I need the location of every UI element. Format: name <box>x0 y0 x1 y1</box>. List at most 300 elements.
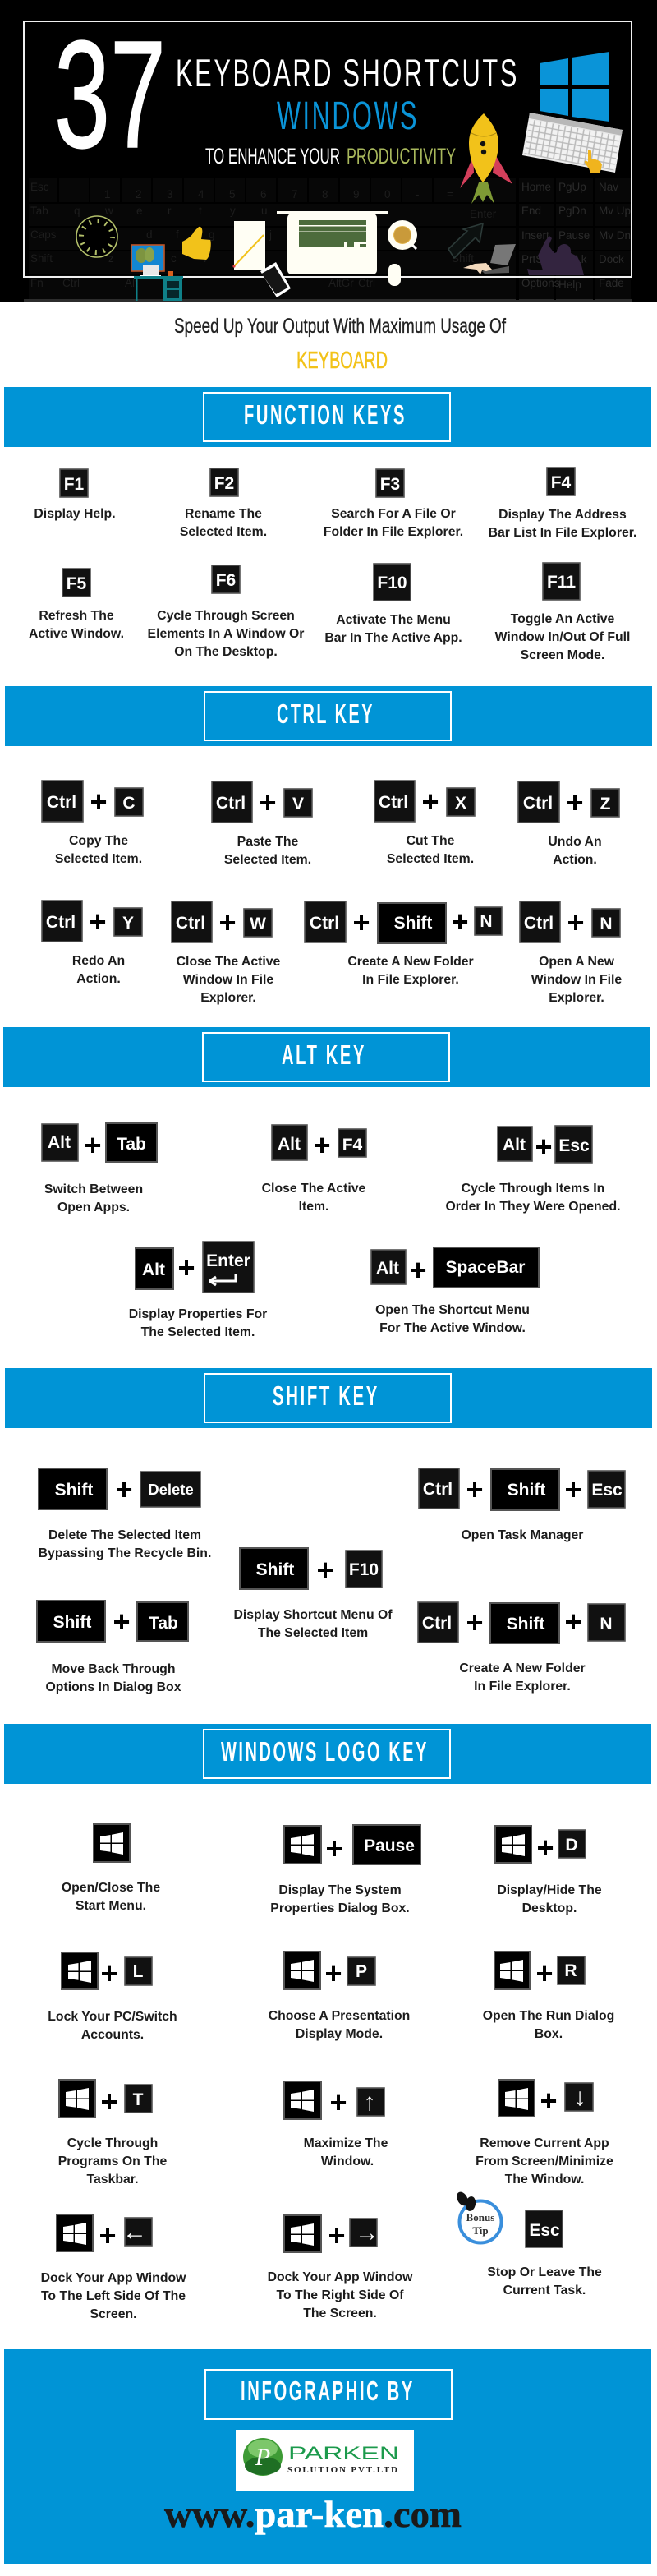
shortcut: F6: Cycle Through Screen <box>157 609 295 623</box>
bonus tip: esc <box>454 2190 602 2297</box>
faded keyboard background: Ctrl <box>62 277 80 289</box>
faded keyboard background: q <box>74 205 80 217</box>
shortcut: shift+delete: + <box>115 1472 133 1506</box>
faded keyboard background: u <box>261 205 268 217</box>
faded keyboard background: 6 <box>260 188 267 200</box>
shortcut: alt+spacebar: SpaceBar <box>446 1258 525 1277</box>
shortcut: win+r: + <box>535 1956 554 1990</box>
shortcut: alt+spacebar: Alt <box>376 1259 399 1278</box>
heading: function keys <box>4 387 651 447</box>
shortcut: win+l: L <box>133 1962 144 1981</box>
shortcut: win+t: Taskbar. <box>87 2173 138 2187</box>
faded keyboard background: PgUp <box>558 181 586 193</box>
shortcut: ctrl+shift+n: In File Explorer. <box>362 973 459 987</box>
shortcut: win+right: The Screen. <box>303 2306 377 2320</box>
shortcut: win+pause: Display The System <box>278 1883 402 1897</box>
shortcut: ctrl+shift+n: In File Explorer. <box>474 1680 571 1694</box>
shortcut: F2 <box>180 468 267 539</box>
shortcut: win+down: The Window. <box>505 2173 584 2187</box>
shortcut: win+left: + <box>99 2219 117 2252</box>
shortcut: F10: F10 <box>377 574 407 592</box>
shortcut: alt+esc: + <box>535 1130 553 1164</box>
shortcut: ctrl+v: Ctrl <box>216 794 246 813</box>
faded keyboard background: Fn <box>30 277 44 289</box>
shortcut: F6 <box>148 565 304 659</box>
shortcut: F2: F2 <box>214 474 234 493</box>
shortcut: alt+f4: + <box>313 1128 331 1162</box>
shortcut: ctrl+v: Paste The <box>237 835 299 849</box>
heading: shift key <box>5 1368 652 1428</box>
tagline: TO ENHANCE YOUR <box>205 144 340 168</box>
shortcut: alt+esc: Esc <box>558 1136 590 1155</box>
shortcut: win+t: + <box>100 2085 118 2118</box>
faded keyboard background: Ctrl <box>358 277 375 289</box>
shortcut: ctrl+y: Y <box>122 914 134 933</box>
faded keyboard background: 8 <box>322 188 328 200</box>
shortcut: alt+enter: + <box>177 1251 195 1284</box>
faded keyboard background: r <box>168 205 172 217</box>
bonus tip: esc: Current Task. <box>503 2283 586 2297</box>
shortcut: ctrl+shift+n: Shift <box>394 914 432 933</box>
faded keyboard background: ScrLk <box>558 253 587 265</box>
bonus tip: esc: Stop Or Leave The <box>487 2265 602 2279</box>
shortcut: win+right: + <box>328 2219 346 2252</box>
shortcut: win+l <box>48 1952 177 2042</box>
shortcut: ctrl+z: Z <box>600 795 611 813</box>
shortcut: alt+spacebar: Open The Shortcut Menu <box>375 1303 530 1317</box>
shortcut: ctrl+shift+n: + <box>564 1605 582 1638</box>
faded keyboard background: c <box>171 252 177 265</box>
shortcut: win+d <box>495 1826 602 1915</box>
shortcut: win+t <box>58 2080 167 2187</box>
shortcut: ctrl+x: Cut The <box>407 834 455 848</box>
shortcut: win+d: Display/Hide The <box>497 1883 602 1897</box>
icon: thumbs up <box>182 227 211 260</box>
icon: mouse <box>388 264 401 286</box>
shortcut: ctrl+shift+esc: Open Task Manager <box>462 1528 583 1542</box>
shortcut: ctrl+x: X <box>455 794 466 813</box>
shortcut: ctrl+n: N <box>600 915 613 933</box>
faded keyboard background: Alt <box>125 277 138 289</box>
shortcut: alt+esc <box>445 1126 621 1214</box>
shortcut: win+left: ← <box>122 2219 147 2246</box>
shortcut: ctrl+shift+esc: Ctrl <box>423 1480 453 1499</box>
shortcut: ctrl+v <box>212 781 312 867</box>
shortcut: F10: Activate The Menu <box>336 613 451 627</box>
shortcut: ctrl+c: Selected Item. <box>55 852 142 866</box>
shortcut: alt+tab <box>42 1123 157 1214</box>
shortcut: win+p <box>269 1952 410 2041</box>
faded keyboard background: Mv Dn <box>599 229 631 242</box>
white frame <box>24 21 632 277</box>
icon: outlined arrow <box>448 223 483 258</box>
shortcut: ctrl+shift+n: + <box>352 906 370 939</box>
shortcut: alt+enter: The Selected Item. <box>141 1325 255 1339</box>
shortcut: shift+tab <box>37 1601 188 1694</box>
faded keyboard background: 5 <box>229 188 236 200</box>
big number 37: 37 <box>54 10 166 180</box>
shortcut: ctrl+shift+n <box>305 901 502 987</box>
shortcut: shift+f10: Display Shortcut Menu Of <box>233 1608 393 1622</box>
shortcut: ctrl+w <box>172 901 281 1005</box>
faded keyboard background: End <box>521 205 541 217</box>
shortcut: ctrl+c: Ctrl <box>47 793 76 812</box>
shortcut: shift+tab: Tab <box>149 1614 178 1633</box>
shortcut: win+left: Dock Your App Window <box>41 2271 186 2285</box>
shortcut: alt+f4: F4 <box>342 1136 363 1154</box>
faded keyboard background: w <box>104 205 113 217</box>
website url: www.par-ken.com <box>164 2493 462 2535</box>
faded keyboard background: AltGr <box>328 277 354 289</box>
shortcut: alt+enter: Alt <box>142 1260 165 1279</box>
faded keyboard background: Options <box>521 277 560 289</box>
shortcut: win+right <box>268 2215 413 2320</box>
shortcut: shift+tab: + <box>113 1605 131 1638</box>
shortcut: alt+tab: Switch Between <box>44 1182 143 1196</box>
shortcut: F10: Bar In The Active App. <box>324 631 462 645</box>
faded keyboard background: = <box>447 188 453 200</box>
panel: shift key <box>5 1368 652 1694</box>
shortcut: alt+tab: Open Apps. <box>57 1200 130 1214</box>
shortcut: win+up: ↑ <box>363 2089 376 2116</box>
shortcut: win+l: + <box>100 1956 118 1990</box>
shortcut: win+left <box>41 2214 186 2321</box>
shortcut: shift+tab: Shift <box>53 1613 91 1632</box>
shortcut: F1: Display Help. <box>34 507 116 521</box>
shortcut: win+p: Display Mode. <box>296 2027 383 2041</box>
tagline: PRODUCTIVITY <box>347 144 456 168</box>
shortcut: ctrl+x: Selected Item. <box>387 852 474 866</box>
shortcut: win+t: Cycle Through <box>67 2136 158 2150</box>
shortcut: F3 <box>324 469 463 539</box>
shortcut: ctrl+w: Close The Active <box>177 955 281 969</box>
logo: parken solution: SOLUTION PVT.LTD <box>287 2465 397 2475</box>
faded keyboard background: Enter <box>470 208 497 220</box>
shortcut: ctrl+w: Ctrl <box>176 914 205 933</box>
faded keyboard background: 2 <box>136 188 142 200</box>
faded keyboard background: g <box>209 228 215 241</box>
shortcut: F6: Elements In A Window Or <box>148 627 304 641</box>
faded keyboard background: d <box>146 228 153 241</box>
shortcut: win+up: Window. <box>321 2154 374 2168</box>
panel: ctrl key <box>5 686 652 1005</box>
faded keyboard background: Tab <box>30 205 48 217</box>
shortcut: shift+tab: Move Back Through <box>52 1662 175 1676</box>
shortcut: win+r: Open The Run Dialog <box>483 2009 614 2023</box>
shortcut: win+t: T <box>133 2090 144 2109</box>
shortcut: win+d: Desktop. <box>522 1901 577 1915</box>
shortcut: shift+delete <box>39 1468 211 1560</box>
faded keyboard background: Mv Up <box>599 205 631 217</box>
shortcut: alt+f4: Item. <box>299 1200 328 1214</box>
panel: function keys <box>4 387 651 662</box>
faded keyboard background: 1 <box>104 188 111 200</box>
shortcut: ctrl+v: Selected Item. <box>224 853 311 867</box>
shortcut: win+d: + <box>536 1831 554 1864</box>
shortcut: F2: Selected Item. <box>180 525 267 539</box>
shortcut: win+up: + <box>329 2085 347 2119</box>
shortcut: win+l: Lock Your PC/Switch <box>48 2010 177 2024</box>
shortcut: ctrl+n: Explorer. <box>549 991 604 1005</box>
shortcut: ctrl+shift+n: Create A New Folder <box>347 955 474 969</box>
shortcut: alt+esc: Cycle Through Items In <box>462 1182 604 1196</box>
shortcut: ctrl+c: Copy The <box>69 834 128 848</box>
faded keyboard background: 4 <box>198 188 204 200</box>
shortcut: ctrl+w: W <box>250 915 266 933</box>
shortcut: ctrl+z: Undo An <box>548 835 602 849</box>
heading: windows logo key: WINDOWS LOGO KEY <box>221 1737 429 1767</box>
shortcut: ctrl+y <box>42 901 142 986</box>
shortcut: ctrl+shift+n: Ctrl <box>422 1614 452 1633</box>
shortcut: win+p: P <box>356 1962 367 1981</box>
shortcut: shift+f10: + <box>316 1553 334 1587</box>
shortcut: ctrl+z <box>518 781 619 867</box>
faded keyboard background: Home <box>521 181 551 193</box>
faded keyboard background: Insert <box>521 229 549 242</box>
keyword: keyboard: KEYBOARD <box>296 348 388 374</box>
shortcut: win+r: R <box>564 1961 577 1980</box>
shortcut: ctrl+y: Ctrl <box>46 913 76 932</box>
shortcut: win+pause: + <box>325 1832 343 1865</box>
subtitle <box>174 315 506 374</box>
shortcut: alt+tab: + <box>84 1128 102 1162</box>
icon: notebook and pencil <box>232 221 265 270</box>
title: windows: WINDOWS <box>277 94 419 138</box>
shortcut: ctrl+shift+n: N <box>480 912 493 931</box>
shortcut: shift+delete: Delete The Selected Item <box>48 1528 201 1542</box>
shortcut: F11: Screen Mode. <box>521 648 604 662</box>
shortcut: ctrl+v: + <box>259 786 277 819</box>
shortcut: F11 <box>495 563 630 662</box>
bonus tip: esc: Esc <box>529 2221 560 2240</box>
shortcut: ctrl+shift+esc: + <box>466 1472 484 1506</box>
faded keyboard background: z <box>108 252 114 265</box>
icon: wall clock <box>76 216 117 257</box>
heading: shift key: SHIFT KEY <box>273 1381 379 1412</box>
shortcut: F5: Active Window. <box>29 627 124 641</box>
shortcut: win+down: Remove Current App <box>480 2136 609 2150</box>
shortcut: ctrl+c: C <box>122 794 136 813</box>
shortcut: alt+esc: Alt <box>503 1136 526 1154</box>
shortcut: F6: On The Desktop. <box>174 645 278 659</box>
faded keyboard background: t <box>199 205 202 217</box>
shortcut: win: Start Menu. <box>76 1899 146 1913</box>
faded keyboard background: Fade <box>599 277 624 289</box>
shortcut: win+t: Programs On The <box>58 2154 167 2168</box>
shortcut: win+r <box>483 1952 614 2041</box>
shortcut: F5: F5 <box>67 574 87 593</box>
shortcut: ctrl+shift+esc: Shift <box>508 1481 545 1500</box>
shortcut: win+down: ↓ <box>573 2084 586 2111</box>
faded keyboard background <box>24 178 632 302</box>
icon: person silhouette <box>527 236 584 275</box>
shortcut: ctrl+x: + <box>421 785 439 818</box>
heading: alt key <box>3 1027 650 1087</box>
shortcut: alt+spacebar: For The Active Window. <box>379 1321 526 1335</box>
panel: footer <box>4 2349 651 2564</box>
faded keyboard background: v <box>202 252 208 265</box>
heading: ctrl key <box>5 686 652 746</box>
icon: windows logo <box>540 52 609 122</box>
shortcut: win <box>62 1824 160 1913</box>
shortcut: ctrl+w: Explorer. <box>200 991 256 1005</box>
faded keyboard background: Dock <box>599 253 624 265</box>
faded keyboard background: Esc <box>30 181 49 193</box>
shortcut: alt+f4: Alt <box>278 1135 301 1154</box>
shortcut: ctrl+shift+esc: Esc <box>591 1481 623 1500</box>
shortcut: ctrl+y: Redo An <box>72 954 125 968</box>
shortcut: ctrl+shift+n <box>418 1602 625 1694</box>
shortcut: F3: Search For A File Or <box>331 507 456 521</box>
shortcut: ctrl+n: Open A New <box>539 955 615 969</box>
icon: hand on laptop <box>463 244 516 274</box>
shortcut: alt+f4 <box>262 1125 366 1214</box>
shortcut: F4: Bar List In File Explorer. <box>489 526 636 540</box>
shortcut: ctrl+w: + <box>218 906 237 939</box>
shortcut: win+l: Accounts. <box>81 2028 144 2042</box>
shortcut: ctrl+y: Action. <box>76 972 121 986</box>
shortcut: ctrl+x <box>374 781 475 866</box>
shortcut: F6: F6 <box>216 571 236 590</box>
shortcut: alt+esc: Order In They Were Opened. <box>445 1200 621 1214</box>
shortcut: F1: F1 <box>64 475 85 494</box>
shortcut: F11: F11 <box>547 573 576 592</box>
shortcut: ctrl+x: Ctrl <box>379 793 408 812</box>
shortcut: ctrl+n: + <box>567 906 585 939</box>
icon: smartphone <box>260 262 291 297</box>
icon: rocket <box>460 113 512 204</box>
faded keyboard background: - <box>416 188 419 200</box>
heading: infographic by <box>205 2370 452 2419</box>
shortcut: shift+tab: Options In Dialog Box <box>46 1680 181 1694</box>
icon: bonus tip pin badge <box>454 2190 501 2243</box>
faded keyboard background: 9 <box>353 188 360 200</box>
shortcut: ctrl+v: V <box>292 795 304 813</box>
shortcut: F5 <box>29 569 124 641</box>
shortcut: win+down: + <box>540 2084 558 2117</box>
shortcut: ctrl+c: + <box>90 785 108 818</box>
panel: windows logo key <box>4 1724 651 2321</box>
faded keyboard background: Pause <box>558 229 590 242</box>
shortcut: ctrl+shift+esc <box>419 1468 625 1542</box>
subtitle: Speed Up Your Output With Maximum Usage Of <box>174 315 506 338</box>
shortcut: shift+f10: The Selected Item <box>258 1626 368 1640</box>
logo: parken solution <box>236 2430 414 2491</box>
faded keyboard background: e <box>136 205 143 217</box>
shortcut: win: Open/Close The <box>62 1881 160 1895</box>
shortcut: win+d: D <box>565 1836 578 1855</box>
shortcut: F1 <box>34 469 116 521</box>
shortcut: ctrl+c <box>42 781 143 866</box>
shortcut: win+up <box>284 2081 388 2168</box>
icon: open laptop <box>277 211 388 274</box>
shortcut: F10 <box>324 564 462 645</box>
shortcut: ctrl+shift+n: N <box>600 1615 613 1634</box>
faded keyboard background: PrtScn <box>521 253 555 265</box>
shortcut: win+right: To The Right Side Of <box>276 2288 404 2302</box>
shortcut: win+p: + <box>324 1956 342 1990</box>
shortcut: ctrl+shift+n: Shift <box>507 1615 544 1634</box>
shortcut: win+r: Box. <box>535 2027 563 2041</box>
shortcut: ctrl+z: Ctrl <box>523 794 553 813</box>
icon: coffee cup <box>388 220 417 250</box>
shortcut: ctrl+shift+n: Create A New Folder <box>459 1661 586 1675</box>
shortcut: win+right: Dock Your App Window <box>268 2270 413 2284</box>
shortcut: shift+delete: Delete <box>148 1481 194 1498</box>
shortcut: F11: Toggle An Active <box>511 612 615 626</box>
icon: bonus tip pin badge: Bonus <box>466 2211 494 2223</box>
shortcut: alt+enter <box>129 1242 267 1339</box>
shortcut: ctrl+n: Ctrl <box>524 914 554 933</box>
shortcut: win+right: → <box>355 2219 379 2247</box>
shortcut: F2: Rename The <box>185 507 262 521</box>
header banner <box>0 0 657 302</box>
shortcut: alt+enter: Enter <box>206 1251 250 1270</box>
shortcut: alt+tab: Tab <box>117 1135 146 1154</box>
faded keyboard background: y <box>230 205 236 217</box>
shortcut: shift+f10: F10 <box>349 1560 379 1579</box>
heading: alt key: ALT KEY <box>282 1040 366 1071</box>
shortcut: ctrl+n <box>520 901 622 1005</box>
shortcut: ctrl+n: Window In File <box>531 973 622 987</box>
shortcut: alt+spacebar <box>371 1247 539 1335</box>
icon: white keyboard with hand <box>522 113 623 173</box>
faded keyboard background: 7 <box>292 188 298 200</box>
shortcut: ctrl+shift+esc: + <box>564 1472 582 1506</box>
shortcut: F11: Window In/Out Of Full <box>495 630 630 644</box>
heading: windows logo key <box>4 1724 651 1784</box>
logo: parken solution: P <box>255 2444 270 2471</box>
faded keyboard background: f <box>176 228 179 241</box>
shortcut: win+pause: Properties Dialog Box. <box>270 1901 410 1915</box>
shortcut: ctrl+w: Window In File <box>183 973 273 987</box>
shortcut: shift+delete: Shift <box>55 1481 93 1500</box>
shortcut: win+pause <box>270 1825 420 1915</box>
shortcut: ctrl+z: + <box>566 786 584 819</box>
shortcut: ctrl+shift+n: + <box>451 905 469 938</box>
faded keyboard background: 0 <box>384 188 391 200</box>
panel: alt key <box>3 1027 650 1339</box>
shortcut: F5: Refresh The <box>39 609 114 623</box>
shortcut: win+left: To The Left Side Of The <box>41 2289 186 2303</box>
shortcut: alt+spacebar: + <box>409 1253 427 1287</box>
heading: infographic by: INFOGRAPHIC BY <box>241 2376 415 2407</box>
shortcut: win+left: Screen. <box>90 2307 137 2321</box>
shortcut: F3: F3 <box>380 475 400 494</box>
shortcut: F4 <box>489 468 636 540</box>
faded keyboard background: Caps <box>30 228 57 241</box>
shortcut: win+down: From Screen/Minimize <box>476 2154 613 2168</box>
shortcut: alt+tab: Alt <box>48 1133 71 1152</box>
faded keyboard background: j <box>269 228 272 241</box>
faded keyboard background: Help <box>558 279 581 291</box>
faded keyboard background: Shift <box>30 252 53 265</box>
shortcut: shift+f10 <box>233 1548 393 1640</box>
shortcut: F4: F4 <box>551 473 572 492</box>
heading: ctrl key: CTRL KEY <box>277 699 374 730</box>
faded keyboard background: 3 <box>167 188 173 200</box>
shortcut: alt+f4: Close The Active <box>262 1182 366 1196</box>
faded keyboard background: Nav <box>599 181 618 193</box>
shortcut: F4: Display The Address <box>498 508 627 522</box>
shortcut: ctrl+shift+n: Ctrl <box>310 914 339 933</box>
heading: function keys: FUNCTION KEYS <box>244 400 407 431</box>
shortcut: ctrl+y: + <box>89 905 107 938</box>
logo: parken solution: PARKEN <box>288 2443 399 2463</box>
shortcut: F3: Folder In File Explorer. <box>324 525 463 539</box>
shortcut: shift+f10: Shift <box>256 1560 294 1579</box>
shortcut: ctrl+shift+n: + <box>466 1606 484 1639</box>
